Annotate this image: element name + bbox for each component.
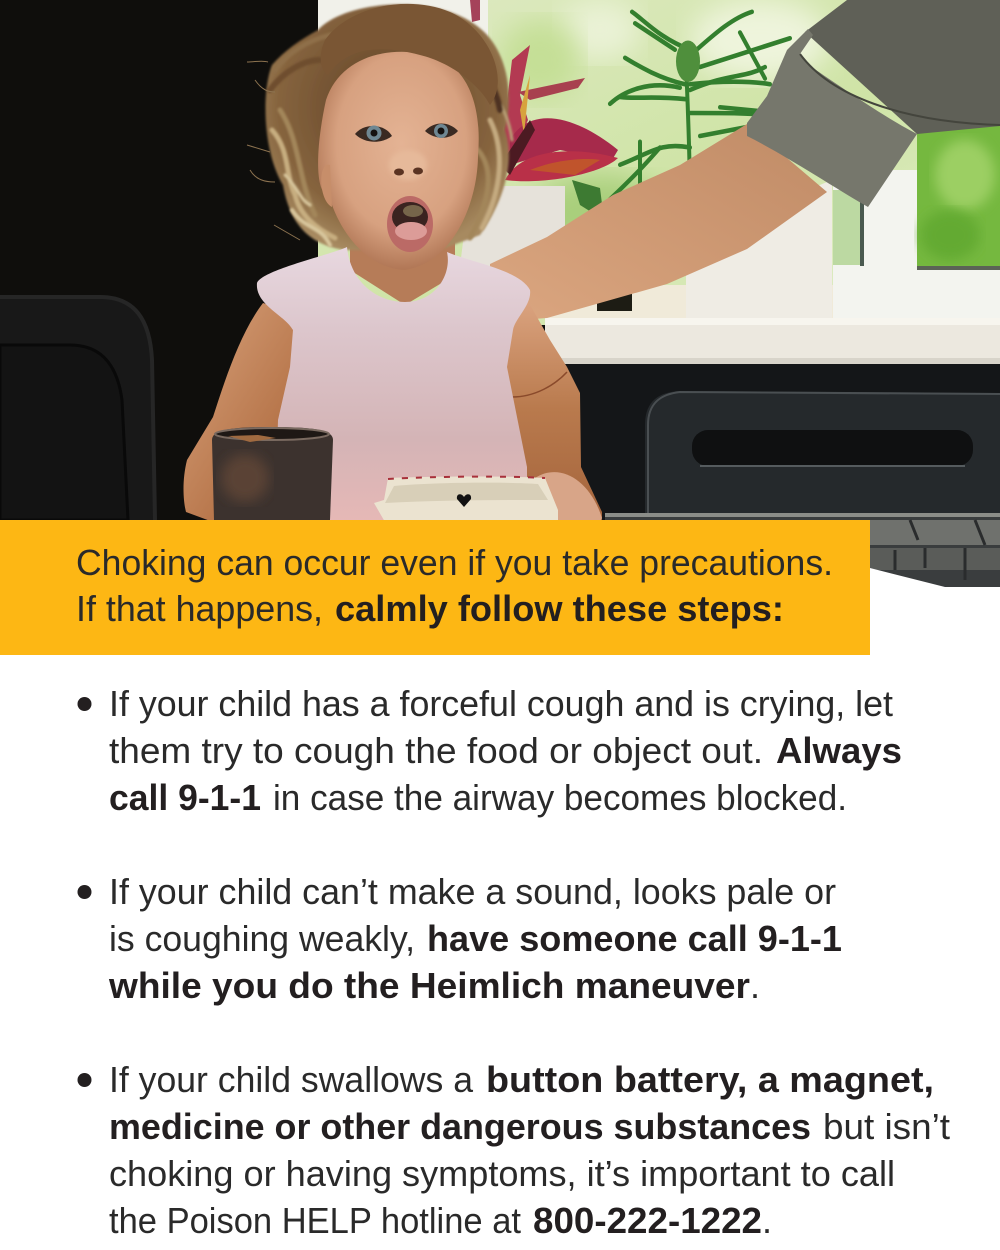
bullet 3 text: choking or having symptoms, it’s important to call [109,1153,895,1194]
right chair back [645,391,1000,520]
bullet 3 text: but isn’t [823,1106,950,1147]
yellow banner [0,520,870,655]
adult arm [490,124,827,320]
banner text: If that happens, [76,588,323,629]
photo: child eating at a table by a window [0,0,1000,590]
child's left arm [184,303,320,522]
bullet dot [78,1073,92,1087]
front hair [321,4,498,105]
bullet 1 text: Always [776,730,902,771]
bullet 2 text: is coughing weakly, [109,918,415,959]
hair back [266,4,512,250]
dark wall under sill [565,364,1000,524]
bullet 2 text: while you do the Heimlich maneuver [108,965,750,1006]
bullet 1 text: in case the airway becomes blocked. [273,777,847,818]
bullet dot [78,697,92,711]
white page area below photo [0,568,1000,1250]
bowl with heart [374,476,558,522]
window with blurred greenery [318,0,1000,325]
white flower pot [460,186,565,266]
bullet 3 text: 800-222-1222 [533,1200,762,1241]
flyaway strands [247,61,300,240]
bullet 2 text [108,871,842,1006]
banner text: calmly follow these steps: [335,588,784,629]
bullet 3 text: . [762,1200,772,1241]
banner text [76,542,833,629]
bullet 3 text: medicine or other dangerous substances [109,1106,811,1147]
window frame [833,125,1000,320]
bullet 1 text [109,683,902,818]
bullet 3 text: the Poison HELP hotline at [109,1200,521,1241]
glass of food [212,427,333,520]
bullet 2 text: have someone call 9-1-1 [427,918,842,959]
small black pot on sill [597,293,632,311]
nose [389,150,427,180]
bullet 2 text: . [750,965,760,1006]
bullet 3 text [109,1059,950,1241]
bib [257,247,530,522]
bullet 1 text: them try to cough the food or object out. [109,730,763,771]
large white pot [686,180,832,320]
bullet 1 text: call 9-1-1 [109,777,261,818]
bullet 1: forceful cough [78,683,902,818]
bullet 2 text: If your child can’t make a sound, looks pale or [109,871,836,912]
bullet 3: button battery and poison hotline [78,1059,950,1241]
open mouth [387,196,433,252]
neck [350,235,455,305]
child's right arm and hand [480,296,602,522]
banner text: Choking can occur even if you take precautions. [76,542,833,583]
plant: aloe [610,12,790,199]
hair curls and highlights [270,30,512,245]
ear [321,165,332,207]
radiator [605,513,1000,587]
bullet 1 text: If your child has a forceful cough and is crying, let [109,683,893,724]
bullet dot [78,885,92,899]
face [318,52,479,270]
eyes [355,123,458,142]
left chair back [0,297,155,520]
bullet 3 text: button battery, a magnet, [486,1059,934,1100]
plant: red flower [470,0,618,220]
adult sleeve [747,0,1000,207]
bullet 3 text: If your child swallows a [109,1059,474,1100]
window sill [545,318,1000,364]
bullet 2: can't make a sound [78,871,842,1006]
